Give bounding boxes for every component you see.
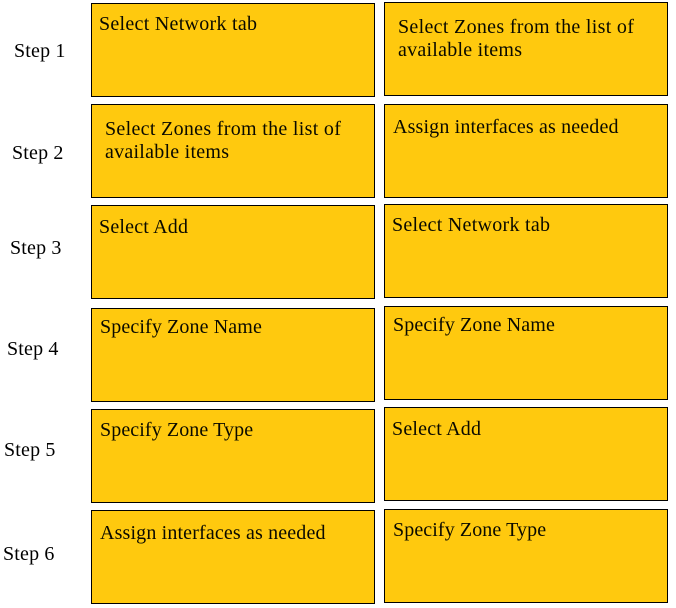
right box row 2: Assign interfaces as needed [393, 116, 619, 138]
left box row 5 [91, 409, 375, 503]
left box row 2 [91, 104, 375, 198]
step label: Step 5: Step 5 [4, 439, 56, 461]
left box row 4: Specify Zone Name [100, 316, 262, 338]
right box row 6 [384, 509, 668, 603]
step label: Step 6: Step 6 [3, 543, 55, 565]
right box row 1 [384, 2, 668, 96]
right box row 3: Select Network tab [392, 214, 550, 236]
left box row 3 [91, 205, 375, 299]
right box row 4 [384, 306, 668, 400]
left box row 2: Select Zones from the list of [105, 118, 341, 140]
left box row 1 [91, 3, 375, 97]
left box row 4 [91, 308, 375, 402]
left box row 2: available items [105, 141, 229, 163]
step label: Step 1: Step 1 [14, 40, 66, 62]
step label: Step 4: Step 4 [7, 338, 59, 360]
right box row 5: Select Add [392, 418, 481, 440]
right box row 2 [384, 104, 668, 198]
right box row 1: available items [398, 39, 522, 61]
left box row 6: Assign interfaces as needed [100, 522, 326, 544]
left box row 6 [91, 510, 375, 604]
right box row 4: Specify Zone Name [393, 314, 555, 336]
step label: Step 2: Step 2 [12, 142, 64, 164]
right box row 5 [384, 407, 668, 501]
left box row 5: Specify Zone Type [100, 419, 253, 441]
right box row 1: Select Zones from the list of [398, 16, 634, 38]
right box row 6: Specify Zone Type [393, 519, 546, 541]
step label: Step 3: Step 3 [10, 237, 62, 259]
right box row 3 [384, 204, 668, 298]
left box row 1: Select Network tab [99, 13, 257, 35]
left box row 3: Select Add [99, 216, 188, 238]
